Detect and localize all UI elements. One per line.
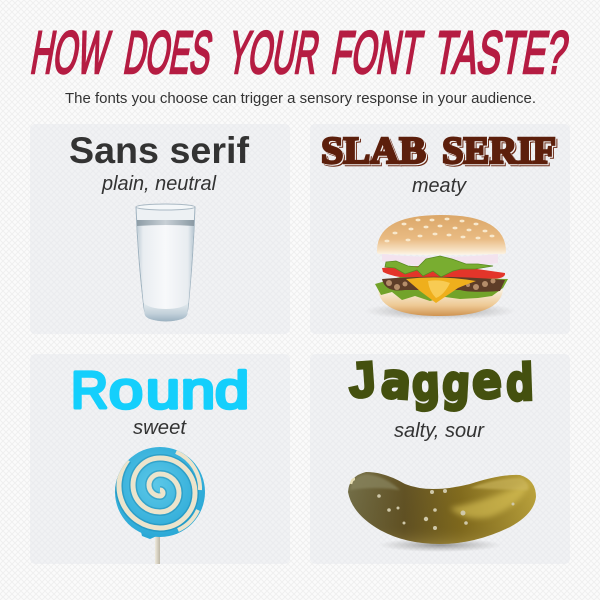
- title: HOW: [27, 18, 115, 86]
- heading: slab serif: SERIF: [442, 130, 556, 172]
- heading: round: R: [71, 362, 108, 420]
- heading: round: n: [181, 362, 215, 420]
- heading: jagged: g: [441, 354, 472, 413]
- heading: jagged: g: [411, 355, 441, 412]
- subtitle: The fonts you choose can trigger a sensory response in your audience.: [65, 90, 536, 107]
- heading: slab serif: SLAB: [322, 131, 427, 173]
- heading: jagged: a: [379, 352, 413, 411]
- title: FONT: [328, 18, 428, 86]
- icon: glass of water: [136, 204, 195, 321]
- icon: burger: [364, 215, 516, 320]
- title: DOES: [120, 18, 218, 86]
- heading: jagged: J: [347, 351, 378, 409]
- heading: round: o: [109, 362, 143, 420]
- taste: sweet: sweet: [133, 417, 187, 439]
- title: YOUR: [224, 18, 325, 86]
- heading: jagged: e: [470, 352, 503, 411]
- panel: sans serif: [30, 124, 290, 334]
- title: [27, 18, 574, 86]
- heading: slab serif: SERIF: [444, 132, 558, 174]
- heading: round: u: [146, 362, 180, 420]
- heading: slab serif: [321, 130, 558, 174]
- icon: lollipop: [115, 447, 205, 564]
- heading: round: [71, 362, 249, 420]
- panel: round: [30, 354, 290, 564]
- icon: pickle: [348, 472, 536, 552]
- heading: jagged: d: [505, 354, 535, 412]
- heading: slab serif: SLAB: [323, 132, 428, 174]
- heading: slab serif: SERIF: [443, 131, 557, 173]
- taste: salty, sour: salty, sour: [394, 420, 485, 442]
- heading: round: d: [215, 362, 249, 420]
- heading: jagged: [347, 351, 535, 413]
- taste: plain, neutral: plain, neutral: [101, 173, 217, 195]
- panel: jagged: [310, 351, 570, 564]
- panel: slab serif: [310, 124, 570, 334]
- heading: slab serif: SLAB: [321, 130, 426, 172]
- heading: sans serif: Sans serif: [69, 130, 250, 171]
- taste: meaty: meaty: [412, 175, 467, 197]
